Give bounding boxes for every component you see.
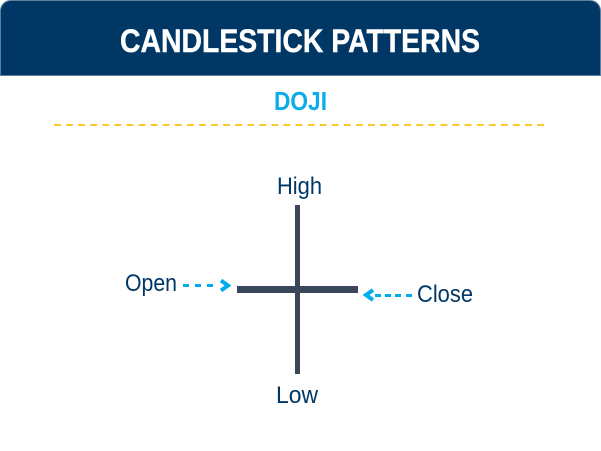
label: High: High <box>277 173 322 200</box>
subtitle: Doji: DOJI <box>274 86 327 116</box>
title: CANDLESTICK PATTERNS <box>120 23 480 59</box>
arrow: close pointing to candlestick <box>366 290 412 300</box>
label: Low: Low <box>276 382 319 409</box>
header banner <box>0 0 600 76</box>
label: Close: Close <box>417 281 473 308</box>
arrow: open pointing to candlestick <box>183 280 228 290</box>
doji candlestick <box>237 205 358 374</box>
label: Open: Open <box>125 270 177 297</box>
